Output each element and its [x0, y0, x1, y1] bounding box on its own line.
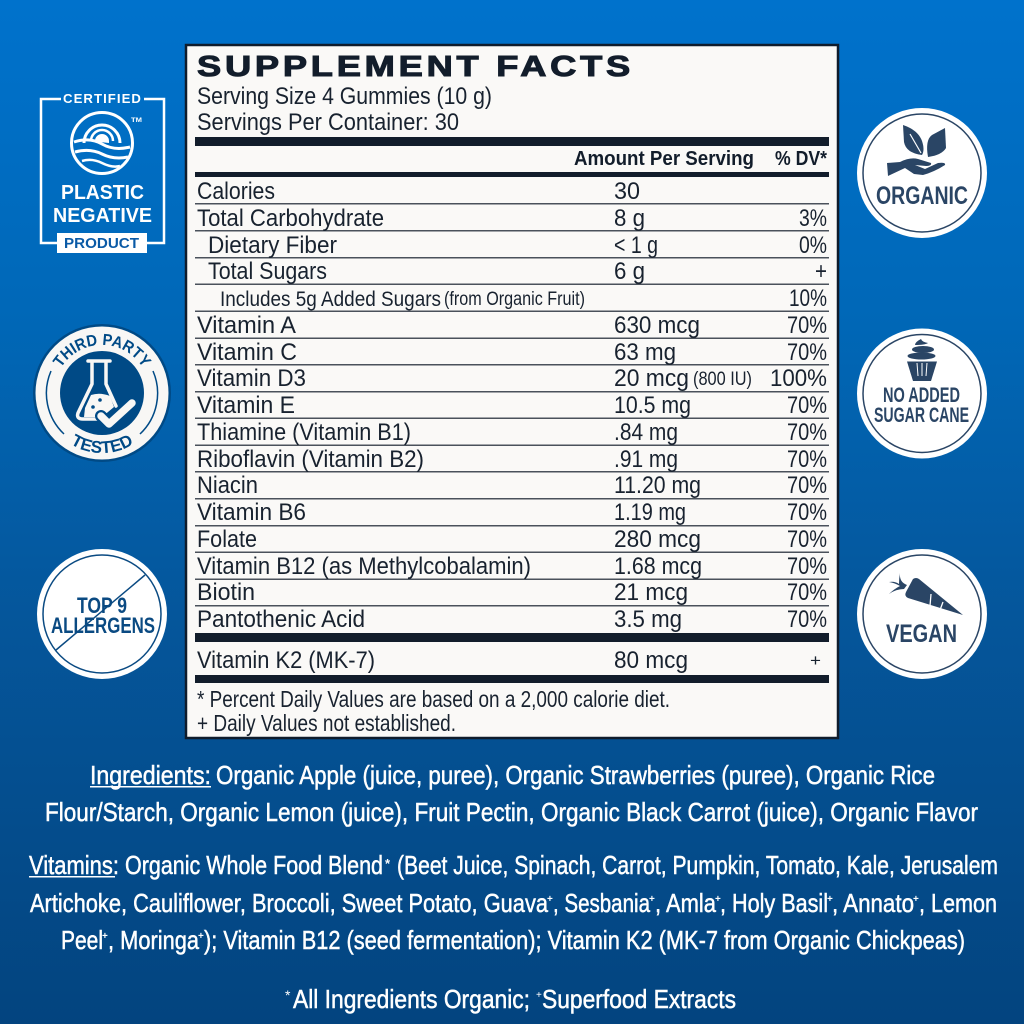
nutrient rows: 70%: [787, 419, 827, 446]
badge: certified plastic negative: [41, 92, 164, 253]
badge: top 9 allergens: ALLERGENS: [51, 613, 155, 638]
superscript marks: +: [649, 894, 655, 905]
ingredients text: [45, 760, 978, 827]
nutrient rows: .91 mg: [614, 446, 678, 473]
footnote: organic and superfood: All Ingredients Organic;: [293, 984, 530, 1014]
nutrient rows: Biotin: [197, 579, 255, 606]
superscript marks: +: [913, 894, 919, 905]
vitamins text: , Moringa: [108, 925, 199, 955]
nutrient rows: Calories: [197, 178, 275, 205]
nutrient rows: 630 mcg: [614, 312, 700, 339]
badge: no added sugar cane: NO ADDED: [883, 384, 960, 407]
nutrient rows: 70%: [787, 392, 827, 419]
badge: certified plastic negative: PRODUCT: [64, 236, 139, 252]
nutrient rows: 1.68 mcg: [614, 553, 702, 580]
nutrient rows: 8 g: [614, 205, 645, 232]
nutrient rows: Vitamin K2 (MK-7): [197, 647, 375, 674]
badge: top 9 allergens: [37, 549, 167, 679]
nutrient rows: Vitamin A: [197, 312, 296, 339]
vitamins text: , Lemon: [919, 888, 997, 918]
nutrient rows: Folate: [197, 526, 257, 553]
vitamins text: Artichoke, Cauliflower, Broccoli, Sweet Potato, Guava: [30, 888, 548, 918]
badge: top 9 allergens: TOP 9: [77, 593, 127, 618]
icon: carrot: [889, 573, 963, 615]
nutrient rows: Pantothenic Acid: [197, 606, 365, 633]
icon: cupcake: [907, 339, 937, 381]
nutrient rows: 280 mcg: [614, 526, 701, 553]
superscript marks: +: [547, 894, 553, 905]
nutrient rows: 70%: [787, 339, 827, 366]
small row notes: Includes 5g Added Sugars: [220, 288, 441, 311]
badge: certified plastic negative: PLASTIC: [61, 182, 144, 204]
icon: ocean and sun: [72, 112, 132, 174]
nutrient rows: 30: [614, 178, 640, 205]
nutrient rows: Vitamin C: [197, 339, 297, 366]
vitamins text: , Amla: [655, 888, 716, 918]
serving information: Serving Size 4 Gummies (10 g): [197, 83, 492, 110]
badge: organic: [857, 108, 987, 238]
nutrient rows: 1.19 mg: [614, 499, 686, 526]
ingredients text: Ingredients:: [90, 760, 211, 790]
serving information: [197, 83, 492, 136]
nutrient rows: 63 mg: [614, 339, 676, 366]
nutrient rows: 6 g: [614, 258, 645, 285]
vitamins text: Vitamins:: [29, 850, 119, 880]
badge: organic: ORGANIC: [876, 182, 968, 210]
nutrient rows: Dietary Fiber: [208, 232, 337, 259]
vitamins text: Organic Whole Food Blend: [125, 850, 383, 880]
badge: certified plastic negative: CERTIFIED: [63, 92, 142, 106]
label: tested: TESTED: [74, 434, 132, 453]
nutrient rows: 21 mcg: [614, 579, 688, 606]
vitamins text: , Sesbania: [553, 888, 650, 918]
nutrient rows: 10.5 mg: [614, 392, 691, 419]
nutrient rows: 80 mcg: [614, 647, 688, 674]
icon: flask with check: [78, 361, 132, 424]
nutrient rows: Riboflavin (Vitamin B2): [197, 446, 424, 473]
footnotes: + Daily Values not established.: [197, 710, 456, 736]
footnote: organic and superfood: *: [285, 987, 291, 1003]
nutrient rows: 70%: [787, 579, 827, 606]
nutrient rows: 3%: [799, 205, 827, 232]
nutrient rows: < 1 g: [614, 232, 658, 259]
small row notes: (800 IU): [693, 369, 752, 390]
superscript marks: +: [198, 931, 204, 942]
badge: no added sugar cane: [857, 328, 987, 458]
nutrient rows: 100%: [770, 365, 827, 392]
small row notes: [220, 288, 821, 670]
table rules: [195, 137, 829, 683]
small row notes: +: [810, 651, 821, 670]
nutrient rows: Total Sugars: [208, 258, 327, 285]
superscript marks: *: [385, 856, 391, 871]
small row notes: (from Organic Fruit): [444, 289, 585, 310]
panel: supplement facts: [186, 45, 838, 738]
nutrient rows: Niacin: [197, 472, 258, 499]
badge: vegan: VEGAN: [886, 620, 957, 648]
nutrient rows: .84 mg: [614, 419, 678, 446]
table header: % DV*: [775, 148, 827, 170]
nutrient rows: 70%: [787, 553, 827, 580]
nutrient rows: Total Carbohydrate: [197, 205, 384, 232]
nutrient rows: 70%: [787, 526, 827, 553]
nutrient rows: 0%: [799, 232, 827, 259]
footnotes: [197, 686, 670, 736]
nutrient rows: Vitamin E: [197, 392, 295, 419]
nutrient rows: 70%: [787, 472, 827, 499]
nutrient rows: 70%: [787, 446, 827, 473]
label: third party: THIRD PARTY: [52, 334, 152, 366]
nutrient rows: 70%: [787, 606, 827, 633]
nutrient rows: 70%: [787, 312, 827, 339]
nutrient rows: Thiamine (Vitamin B1): [197, 419, 411, 446]
badge: certified plastic negative: TM: [131, 117, 142, 124]
nutrient rows: [197, 178, 827, 674]
serving information: Servings Per Container: 30: [197, 109, 459, 136]
badge: certified plastic negative: NEGATIVE: [53, 205, 152, 227]
vitamins text: , Holy Basil: [720, 888, 828, 918]
vitamins text: , Annato: [832, 888, 914, 918]
nutrient rows: 10%: [789, 285, 827, 312]
icon: leaves and hand: [887, 125, 946, 176]
table header: Amount Per Serving: [574, 148, 754, 170]
badge: vegan: [857, 549, 987, 679]
nutrient rows: +: [815, 258, 827, 285]
nutrient rows: 70%: [787, 499, 827, 526]
footnote: organic and superfood: +: [536, 990, 542, 1001]
footnote: organic and superfood: [285, 984, 736, 1014]
superscript marks: +: [827, 894, 833, 905]
nutrient rows: Vitamin B6: [197, 499, 306, 526]
footnote: organic and superfood: Superfood Extracts: [542, 984, 736, 1014]
heading: supplement facts: SUPPLEMENT FACTS: [197, 51, 634, 83]
nutrient rows: 11.20 mg: [614, 472, 701, 499]
footnotes: * Percent Daily Values are based on a 2,000 calorie diet.: [197, 686, 670, 712]
badge: third party tested: [33, 324, 171, 462]
superscript marks: +: [102, 931, 108, 942]
nutrient rows: Vitamin D3: [197, 365, 306, 392]
vitamins text: [29, 850, 998, 955]
nutrient rows: 20 mcg: [614, 365, 689, 392]
nutrient rows: Vitamin B12 (as Methylcobalamin): [197, 553, 531, 580]
badge: no added sugar cane: SUGAR CANE: [874, 404, 969, 427]
vitamins text: Peel: [61, 925, 103, 955]
nutrient rows: 3.5 mg: [614, 606, 682, 633]
superscript marks: +: [715, 894, 721, 905]
superscript marks: [102, 856, 919, 942]
